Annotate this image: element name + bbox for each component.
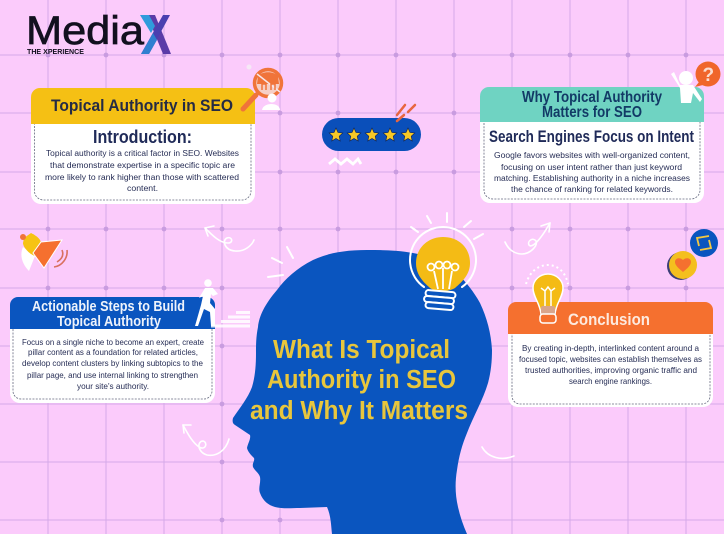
body text: steps: your site's authority. xyxy=(77,381,149,391)
body text: intent: Google favors websites with well-organized content, xyxy=(494,150,690,160)
body text: intent: matching. Establishing authority in a niche increases xyxy=(494,173,691,183)
body text: introduction: that demonstrate expertise in a specific topic are xyxy=(50,160,235,170)
icon: small light bulb xyxy=(526,265,568,323)
icon: magnifying glass with person xyxy=(243,64,282,110)
main title: What Is Topical xyxy=(273,336,450,364)
body text: introduction xyxy=(45,148,240,193)
main title: Authority in SEO xyxy=(267,366,456,394)
body text: steps: develop content clusters by linking subtopics to the xyxy=(22,358,203,368)
decorative rays near head xyxy=(268,247,293,277)
body text: conclusion xyxy=(519,343,703,386)
heading: Why Topical Authority Matters for SEO: Matters for SEO xyxy=(542,104,642,121)
body text: conclusion: trusted authorities, improving organic traffic and xyxy=(525,365,697,375)
panel header: blue xyxy=(10,297,215,329)
panel: introduction xyxy=(31,88,255,204)
heading: Actionable Steps to Build Topical Authority: Actionable Steps to Build xyxy=(32,299,185,315)
panel header: yellow xyxy=(31,88,255,124)
body text: intent: focusing on user intent rather than just keyword xyxy=(501,162,682,172)
heading: Conclusion: Conclusion xyxy=(568,310,650,329)
body text: intent xyxy=(494,150,691,194)
body text: steps xyxy=(22,337,204,391)
subheading: Introduction: Introduction: xyxy=(93,126,192,147)
icon: repost badge xyxy=(690,229,718,257)
panel header: teal xyxy=(480,87,704,122)
logo: MediaX: THE XPERIENCE xyxy=(27,49,84,56)
panel header: orange xyxy=(508,302,713,334)
heading: Why Topical Authority Matters for SEO xyxy=(522,89,662,121)
body text: introduction: more likely to rank higher than those with scattered xyxy=(45,172,239,182)
decorative marks xyxy=(397,105,415,121)
icon: megaphone xyxy=(20,233,67,271)
body text: intent: the chance of ranking for related keywords. xyxy=(511,184,673,194)
body text: conclusion: search engine rankings. xyxy=(569,376,652,386)
star rating badge xyxy=(322,118,421,151)
icon: person with question bubble xyxy=(671,62,720,103)
body text: introduction: content. xyxy=(127,183,158,193)
body text: steps: Focus on a single niche to become an expert, create xyxy=(22,337,204,347)
logo: MediaX: Media xyxy=(26,9,145,53)
main title xyxy=(250,336,468,425)
heading: Topical Authority in SEO: Topical Authority in SEO xyxy=(51,96,233,115)
icon: person with question bubble: ? xyxy=(702,65,714,86)
panel: why it matters xyxy=(480,87,704,203)
heading: Why Topical Authority Matters for SEO: Why Topical Authority xyxy=(522,89,662,106)
head silhouette xyxy=(233,250,492,534)
panel: actionable steps xyxy=(10,297,215,403)
body text: steps: pillar page, and use internal linking to strengthen xyxy=(27,370,198,380)
heading: Actionable Steps to Build Topical Authority xyxy=(32,299,185,330)
decorative arrows xyxy=(183,223,550,458)
body text: steps: pillar content as a foundation for related articles, xyxy=(28,347,198,357)
panel: conclusion xyxy=(508,302,713,407)
heading: Actionable Steps to Build Topical Authority: Topical Authority xyxy=(57,314,161,330)
body text: conclusion: focused topic, websites can establish themselves as xyxy=(519,354,703,364)
icon: heart badge xyxy=(667,251,697,280)
icon: person climbing steps xyxy=(195,279,250,328)
body text: introduction: Topical authority is a critical factor in SEO. Websites xyxy=(46,148,240,158)
main title: and Why It Matters xyxy=(250,397,468,425)
body text: conclusion: By creating in-depth, interlinked content around a xyxy=(522,343,699,353)
icon: large light bulb xyxy=(410,213,483,310)
